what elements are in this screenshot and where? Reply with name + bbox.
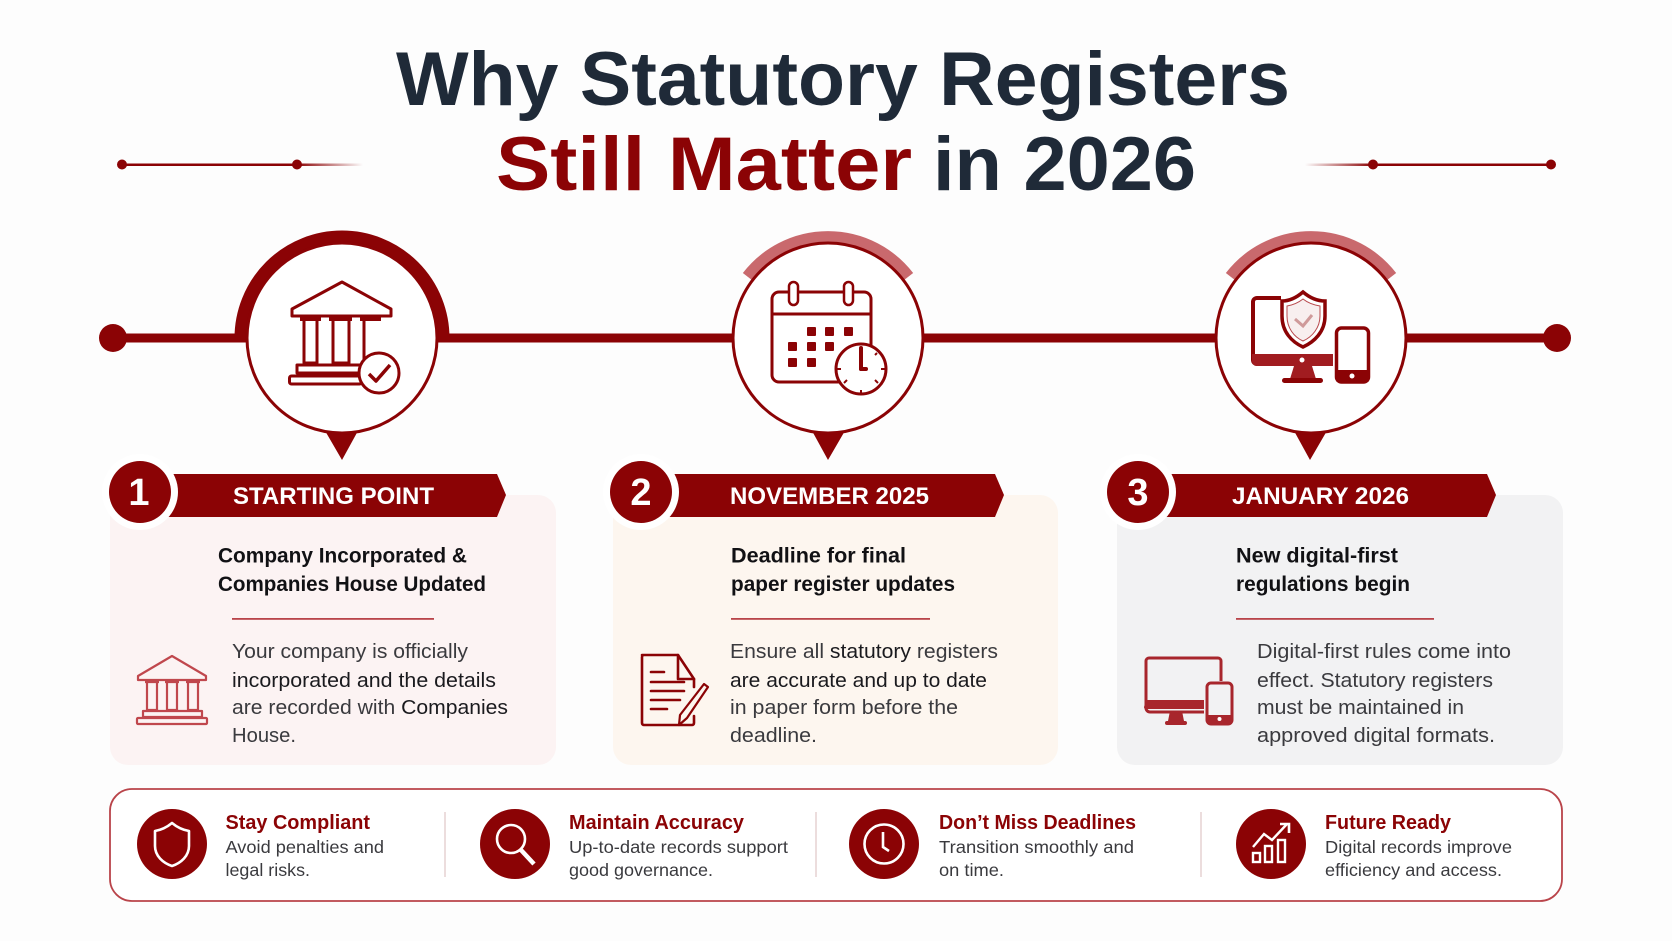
badge: 1 [102,454,178,530]
icon: magnifier [497,825,534,864]
card heading: paper register updates [731,573,955,596]
pointer [1293,429,1328,460]
card body text: are accurate and up to date [730,669,987,692]
ribbon: january 2026 [1100,454,1496,530]
ribbon: november 2025 [603,454,1004,530]
icon: devices with shield [1252,292,1368,383]
step 2 marker [733,238,923,460]
benefit: maintain accuracy: Up-to-date records support [569,837,788,857]
card body text: Ensure all statutory registers [730,640,998,663]
badge: 3: 3 [1127,472,1149,514]
card heading [218,544,486,596]
benefit: maintain accuracy [480,809,788,880]
right title ornament [1305,160,1556,170]
icon: shield [155,823,189,866]
ribbon: november 2025: NOVEMBER 2025 [730,483,929,510]
benefit: future ready: Digital records improve [1325,837,1512,857]
benefit: don't miss deadlines [849,809,1136,880]
card body text: incorporated and the details [232,669,496,692]
card heading [1236,544,1410,596]
ribbon: starting point: STARTING POINT [233,483,434,510]
title: in 2026 [933,122,1196,207]
panel: starting point card [110,495,556,765]
card body text: are recorded with Companies [232,696,508,719]
card body text: approved digital formats. [1257,724,1495,747]
card heading: New digital-first [1236,544,1398,568]
card heading: Deadline for final [731,544,906,568]
badge: 3 [1100,454,1176,530]
badge: 2 [603,454,679,530]
title [396,37,1290,207]
title: Still Matter [496,122,912,207]
benefit: stay compliant: Stay Compliant [226,812,370,834]
benefit: future ready [1236,809,1512,880]
badge: 2: 2 [630,472,652,514]
icon: bank with check [290,282,399,393]
benefit: future ready: Future Ready [1325,812,1452,834]
benefit: don't miss deadlines: Transition smoothly and [939,837,1134,857]
pointer [811,429,846,460]
pointer [324,429,359,460]
benefit: maintain accuracy: Maintain Accuracy [569,812,745,834]
icon: growth chart [1253,824,1289,862]
benefit: don't miss deadlines: on time. [939,860,1004,880]
step 1 marker [241,237,443,460]
badge: 1: 1 [128,472,150,514]
card body text [232,640,508,747]
timeline line [99,324,1571,352]
card body text: in paper form before the [730,696,958,719]
benefit: maintain accuracy: good governance. [569,860,713,880]
card body text: must be maintained in [1257,696,1464,719]
icon: calendar with clock [772,282,886,394]
card heading: Company Incorporated & [218,544,467,568]
card body text: effect. Statutory registers [1257,669,1493,692]
benefit: stay compliant: legal risks. [226,860,310,880]
panel: january 2026 card [1117,495,1563,765]
card body text: House. [232,724,296,747]
thick ring arc [241,237,443,338]
icon: document with pen [642,655,708,725]
benefit: don't miss deadlines: Don’t Miss Deadlines [939,812,1136,834]
panel: november 2025 card [613,495,1058,765]
card body text: deadline. [730,724,817,747]
card body text [730,640,998,747]
icon: small devices [1144,658,1232,725]
card body text: Your company is officially [232,640,469,663]
light ring arc [1231,238,1391,277]
benefit: stay compliant [137,809,384,880]
card body text [1257,640,1511,747]
ribbon: starting point [102,454,506,530]
benefit: stay compliant: Avoid penalties and [226,837,384,857]
card heading: regulations begin [1236,573,1410,596]
panel: benefits strip [110,789,1562,901]
left title ornament [117,160,363,170]
light ring arc [748,238,908,277]
benefit: future ready: efficiency and access. [1325,860,1502,880]
icon: clock [864,824,904,864]
card heading: Companies House Updated [218,573,486,596]
step 3 marker [1216,238,1406,460]
card body text: Digital-first rules come into [1257,640,1511,663]
card heading [731,544,955,596]
ribbon: january 2026: JANUARY 2026 [1232,483,1409,510]
icon: small bank [137,656,207,724]
title: Why Statutory Registers [396,37,1290,122]
